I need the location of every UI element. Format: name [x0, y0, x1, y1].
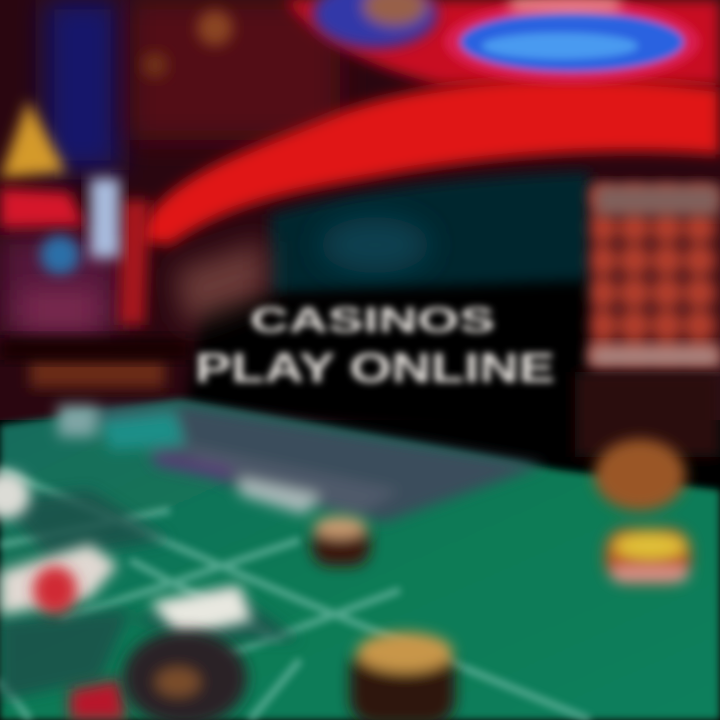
green table felt	[0, 400, 720, 720]
white and red chips left	[0, 471, 252, 720]
chip stacks right	[594, 439, 691, 584]
top right red sign field	[285, 0, 720, 85]
table dark betting squares	[0, 490, 300, 700]
background: upper room	[0, 0, 720, 420]
screen headline: CASINOS	[250, 301, 495, 340]
left counter shadow	[0, 338, 190, 360]
screen headline	[195, 301, 555, 391]
top centre sign	[313, 0, 620, 48]
red pillar	[118, 200, 150, 325]
table lines	[0, 470, 590, 720]
blue oval sign	[444, 0, 700, 84]
laptop keyboard	[58, 405, 545, 522]
chip stacks bottom	[123, 516, 455, 720]
red arch	[135, 78, 720, 245]
right roulette panel	[575, 185, 720, 457]
laptop screen	[175, 172, 590, 445]
left lamp and awning	[0, 100, 165, 388]
screen headline: PLAY ONLINE	[195, 344, 555, 391]
